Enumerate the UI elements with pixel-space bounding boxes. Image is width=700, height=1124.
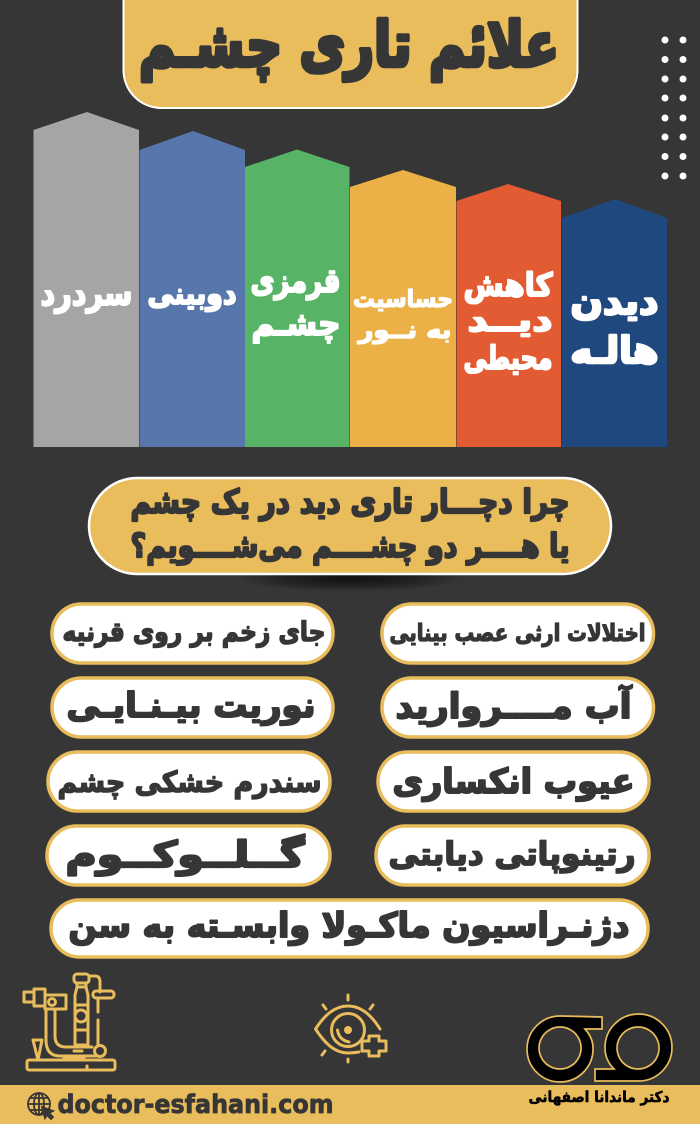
symptom column: light sensitivity: حساسیت [353,285,453,313]
pill: glaucoma: گــلــوکــوم [66,834,305,876]
icon: eye with plus [316,995,386,1062]
question shadow [235,564,465,592]
doctor name: دکتر ماندانا اصفهانی [528,1088,670,1106]
icon: globe with cursor [28,1093,53,1119]
symptom column: red eye [245,150,350,447]
symptom column: seeing halos [562,199,667,447]
question panel: یا هــــر دو چشــــم می‌شــــویم؟ [130,526,570,566]
symptom column: light sensitivity [350,170,456,447]
pill: age-related macular degeneration [51,900,648,957]
title panel [124,0,578,108]
pill: dry eye syndrome [48,752,330,811]
icon: slit lamp [24,974,115,1070]
symptom column: red eye: قرمزی [250,261,340,301]
pill: cataract [382,678,654,737]
pill: hereditary optic nerve disorders: اختلالات ارثی عصب بینایی [390,619,646,647]
symptom column: double vision: دوبینی [148,277,236,312]
symptom column: seeing halos: دیدن [570,280,658,323]
symptom column: reduced peripheral vision [456,184,561,447]
pill: diabetic retinopathy: رتینوپاتی دیابتی [388,835,636,873]
question panel [89,478,611,574]
symptom column: reduced peripheral vision: دیــد [468,301,552,339]
symptom column: reduced peripheral vision: کاهش [464,266,553,304]
footer bar [0,1085,700,1124]
pill: diabetic retinopathy [376,826,649,885]
symptom column: reduced peripheral vision: محیطی [464,339,552,377]
pill: cataract: آب مــــروارید [396,684,632,727]
symptom column: double vision [140,131,245,447]
title: علائم تاری چشـم [139,8,559,81]
logo [527,1014,672,1082]
pill: hereditary optic nerve disorders [382,604,654,663]
symptom column: headache: سردرد [40,274,132,314]
website url: doctor-esfahani.com [58,1090,334,1120]
pill: refractive errors: عیوب انکساری [392,762,634,802]
symptom column: light sensitivity: به نــور [357,316,452,344]
pill: dry eye syndrome: سندرم خشکی چشم [58,765,322,800]
pill: glaucoma [47,826,330,885]
dot grid decoration [662,36,686,180]
pill: corneal scar: جای زخم بر روی قرنیه [62,617,326,648]
pill: refractive errors [378,752,649,811]
pill: corneal scar [52,604,333,663]
pill: optic neuritis [52,678,333,737]
pill: age-related macular degeneration: دژنـراسیون ماکـولا وابسـته به سن [68,906,630,946]
symptom column: red eye: چشـم [252,304,340,343]
question panel: چرا دچـــار تاری دید در یک چشم [130,482,570,522]
pill: optic neuritis: نوریت بیـنـایـی [66,686,316,726]
symptom column: headache [34,112,139,447]
symptom column: seeing halos: هالـه [570,329,658,372]
